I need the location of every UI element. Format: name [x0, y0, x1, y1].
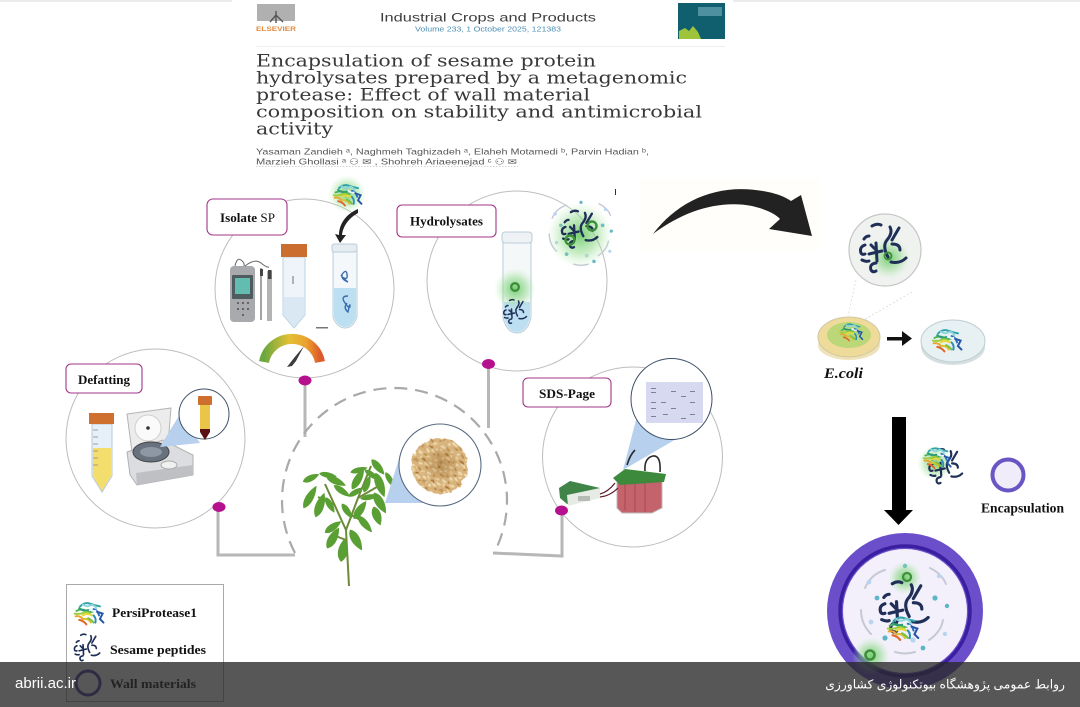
publisher logo: Elsevier: ELSEVIER [256, 26, 296, 33]
publisher logo: Elsevier [256, 4, 296, 33]
icon: tube with oil layer [89, 413, 114, 492]
label: Isolate SP [207, 199, 287, 235]
article title: activity [256, 120, 334, 138]
icon: pH meter [230, 259, 272, 322]
icon: power supply [559, 481, 618, 506]
authors [256, 146, 649, 166]
icon: electrophoresis tank [613, 450, 666, 513]
label: SDS-Page: SDS-Page [539, 386, 595, 401]
legend item: Sesame peptides [74, 634, 206, 661]
legend item: PersiProtease1 [75, 603, 197, 624]
callout: sesame seeds [385, 424, 481, 506]
callout: blue wedge and gel inset [623, 358, 712, 470]
icon: tube with protein solution [332, 244, 357, 328]
article header [256, 3, 725, 166]
legend item: Wall materials [76, 671, 196, 695]
icon: wall material ring [992, 460, 1024, 490]
label: E.coli: E.coli [823, 366, 864, 382]
journal name: Industrial Crops and Products [380, 10, 596, 24]
icon: hydrolysate tube [494, 232, 536, 333]
petri dish: E. coli [818, 317, 880, 360]
footer site address: abrii.ac.ir [15, 676, 76, 692]
curved arrow to antimicrobial test [640, 178, 820, 250]
legend item: Wall materials: Wall materials [110, 676, 196, 691]
article title: composition on stability and antimicrobial [256, 102, 702, 122]
footer bar [0, 662, 1080, 707]
journal volume: Volume 233, 1 October 2025, 121383 [415, 24, 561, 34]
legend item: PersiProtease1: PersiProtease1 [112, 605, 197, 620]
journal cover [678, 3, 725, 39]
icon: tube with orange cap [281, 244, 307, 328]
icon: gauge [264, 327, 328, 367]
sesame plant [300, 457, 397, 586]
arrow: treatment [887, 331, 912, 346]
encapsulated capsule [827, 533, 983, 689]
authors: Marzieh Ghollasi ᵃ ⚇ ✉ , Shohreh Ariaeenejad ᶜ ⚇ ✉ [256, 156, 517, 166]
petri dish: cleared [921, 320, 985, 365]
panel: Hydrolysates [397, 191, 613, 371]
zoomed bubble: peptides on bacteria [848, 214, 921, 322]
panel: Defatting [66, 349, 245, 528]
article title [256, 52, 702, 138]
icon: peptide cloud [547, 201, 613, 268]
article title: protease: Effect of wall material [256, 86, 590, 104]
label: Defatting [66, 364, 142, 393]
connector lines and dashed arc [218, 366, 562, 556]
antimicrobial assay [818, 214, 985, 382]
article title: Encapsulation of sesame protein [256, 52, 596, 70]
panel: Isolate SP [207, 175, 394, 378]
label: SDS-Page [523, 378, 611, 407]
label: Defatting: Defatting [78, 372, 130, 387]
label: Isolate SP: Isolate SP [220, 210, 275, 225]
legend [66, 584, 224, 702]
footer organisation name: روابط عمومی پژوهشگاه بیوتکنولوژی کشاورزی [825, 676, 1065, 692]
authors: Yasaman Zandieh ᵃ, Naghmeh Taghizadeh ᵃ, Elaheh Motamedi ᵇ, Parvin Hadian ᵇ, [256, 146, 649, 156]
icon: protease with arrow [328, 175, 366, 243]
panel: SDS-Page [523, 358, 722, 547]
connector dots [212, 359, 568, 516]
label: Hydrolysates: Hydrolysates [410, 214, 483, 228]
icon: protease and peptides [917, 445, 962, 483]
label: Encapsulation: Encapsulation [981, 500, 1064, 516]
label: Hydrolysates [397, 205, 496, 237]
legend item: Sesame peptides: Sesame peptides [110, 642, 206, 657]
callout: blue wedge and centrifuged tube inset [160, 389, 229, 447]
icon: centrifuge [127, 408, 193, 485]
arrow: down to encapsulation [884, 417, 913, 525]
article title: hydrolysates prepared by a metagenomic [256, 68, 687, 88]
